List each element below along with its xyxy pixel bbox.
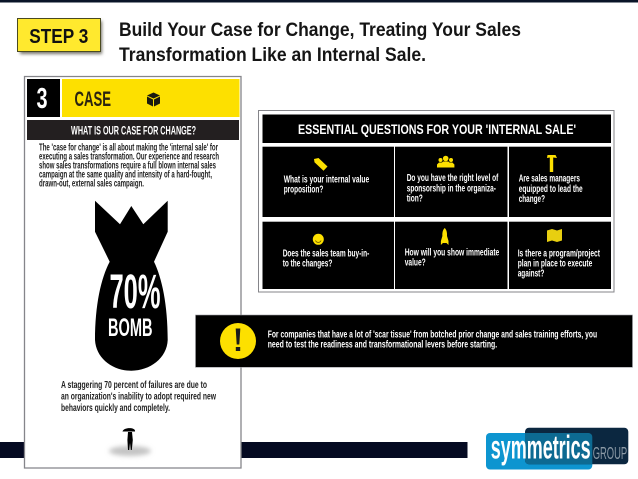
question: project plan: plan in place to execute [518,259,593,270]
bomb caption [61,379,217,414]
icon: people [437,156,454,168]
question: buy-in: Does the sales team buy-in- [283,249,369,260]
question: immediate value: value? [405,257,426,268]
question: sales managers: change? [519,194,545,205]
question: buy-in [262,222,394,289]
question: project plan [509,222,611,289]
question: sponsorship: tion? [407,193,423,204]
slide title: Transformation Like an Internal Sale. [119,44,426,66]
icon: box [147,92,160,106]
question: value proposition [262,147,394,217]
bomb caption: A staggering 70 percent of failures are due to [61,379,207,391]
callout text [268,329,597,351]
question: value proposition: proposition? [284,184,323,195]
icon: exclamation [220,323,256,359]
icon: smiley [313,234,324,245]
bomb caption: behaviors quickly and completely. [61,402,170,414]
case heading band: CASE [74,88,111,111]
panel: case [24,76,241,468]
bomb label: BOMB [108,314,152,342]
essential questions header [262,114,611,143]
callout text: need to test the readiness and transformational levers before starting. [268,340,497,351]
icon: hammer [547,155,557,172]
icon: map [547,229,562,242]
icon: rocket [441,228,448,245]
bomb percent: 70% [110,266,160,319]
case text block: drawn-out, external sales campaign. [39,178,144,189]
question: sponsorship: Do you have the right level of [407,173,499,184]
question: sponsorship: sponsorship in the organiza- [407,183,496,194]
case number block: 3 [36,83,48,115]
question: sales managers: equipped to lead the [519,184,583,195]
case text block: campaign at the same quality and intensity of a hard-fought, [39,170,212,180]
case text block [39,143,219,189]
icon: price tag [314,158,328,171]
step badge [18,18,102,54]
icon: umbrella man [109,428,151,456]
bomb caption: an organization's inability to adopt required new [61,390,217,402]
question: sales managers [509,147,611,217]
case text block: executing a sales transformation. Our experience and research [39,152,219,163]
question: sales managers: Are sales managers [519,174,580,185]
section heading: WHAT IS OUR CASE FOR CHANGE? [71,125,196,137]
case number block [27,79,60,117]
question: immediate value: How will you show immediate [405,247,500,258]
question: sponsorship [395,147,508,217]
callout [196,315,632,367]
top bar [0,0,638,2]
case heading band [62,79,240,117]
question: value proposition: What is your internal value [284,174,370,185]
case text block: The 'case for change' is all about making the 'internal sale' for [39,143,218,154]
panel: essential questions [258,110,614,292]
case text block: show sales transformations require a full blown internal sales [39,160,216,172]
question: buy-in: to the changes? [283,259,332,270]
question: project plan: Is there a program/project [518,249,600,260]
bottom bar [0,442,468,458]
slide title [119,19,521,66]
question: project plan: against? [518,269,544,280]
bomb graphic [95,201,168,371]
question: immediate value [395,222,508,289]
section heading [27,120,239,140]
step badge: STEP 3 [29,26,88,48]
slide title: Build Your Case for Change, Treating Your Sales [119,19,521,41]
